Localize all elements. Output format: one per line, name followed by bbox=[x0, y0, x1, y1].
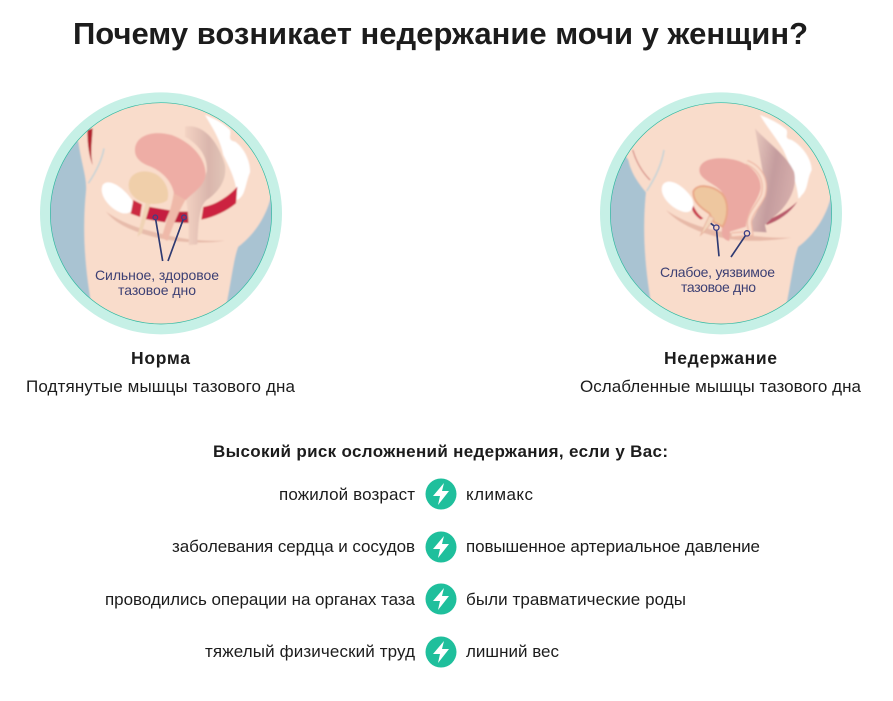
uterus bbox=[699, 158, 761, 241]
uterus bbox=[135, 133, 206, 200]
weak muscles bbox=[692, 206, 703, 220]
icon: bolt bbox=[426, 532, 456, 562]
rectum bbox=[750, 128, 795, 232]
pointer lines bbox=[153, 215, 186, 261]
anatomy circle bbox=[50, 103, 272, 324]
risk row 3 bbox=[105, 584, 686, 614]
rectum bbox=[185, 126, 225, 245]
label: weak pelvic floor: Слабое, уязвимое bbox=[660, 264, 775, 280]
caption: norm: Норма bbox=[131, 348, 190, 368]
illustration: weakened pelvic floor bbox=[600, 92, 843, 334]
top-left vein bbox=[633, 150, 650, 180]
label: weak pelvic floor: тазовое дно bbox=[681, 279, 756, 295]
risk row 3: были травматические роды bbox=[466, 590, 686, 609]
label: weak pelvic floor bbox=[660, 264, 775, 295]
risk row 2 bbox=[172, 532, 760, 562]
thin teal ring bbox=[50, 103, 272, 324]
urethra bbox=[701, 216, 714, 235]
outer mint ring bbox=[40, 92, 282, 334]
label: healthy pelvic floor bbox=[95, 267, 219, 298]
risk heading: Высокий риск осложнений недержания, если у Вас: bbox=[213, 442, 668, 461]
label: healthy pelvic floor: Сильное, здоровое bbox=[95, 267, 219, 283]
bone highlights bbox=[760, 115, 812, 198]
caption: incontinence: Ослабленные мышцы тазового дна bbox=[580, 377, 862, 396]
risk row 3: проводились операции на органах таза bbox=[105, 590, 416, 609]
title: Почему возникает недержание мочи у женщин? bbox=[73, 16, 808, 51]
anatomy circle bbox=[610, 103, 832, 324]
bone highlights bbox=[205, 115, 250, 200]
vagina tract outline bbox=[732, 162, 764, 235]
bladder bbox=[129, 171, 168, 204]
label: healthy pelvic floor: тазовое дно bbox=[118, 282, 196, 298]
caption: norm: Подтянутые мышцы тазового дна bbox=[26, 377, 296, 396]
risk row 4: лишний вес bbox=[466, 642, 560, 661]
icon: bolt bbox=[426, 478, 456, 510]
bladder bbox=[693, 186, 727, 227]
risk row 1 bbox=[279, 478, 534, 510]
risk row 1: климакс bbox=[466, 485, 534, 504]
icon: bolt bbox=[426, 636, 456, 668]
risk row 4: тяжелый физический труд bbox=[205, 642, 415, 661]
pelvic floor muscles bbox=[131, 200, 142, 217]
risk row 4 bbox=[205, 636, 560, 668]
pointer lines bbox=[711, 223, 750, 257]
risk row 2: повышенное артериальное давление bbox=[466, 537, 760, 556]
thin teal ring bbox=[610, 103, 832, 324]
outer mint ring bbox=[600, 92, 842, 334]
lower muscle band bbox=[106, 212, 225, 243]
lower muscle band bbox=[666, 210, 792, 241]
urethra bladder tract bbox=[137, 202, 151, 237]
caption: incontinence: Недержание bbox=[664, 348, 777, 368]
risk row 2: заболевания сердца и сосудов bbox=[172, 537, 415, 556]
caption: incontinence bbox=[580, 348, 862, 396]
risk row 1: пожилой возраст bbox=[279, 485, 415, 504]
icon: bolt bbox=[426, 584, 456, 614]
caption: norm bbox=[26, 348, 296, 396]
illustration: healthy pelvic floor bbox=[40, 92, 283, 334]
vein at top-left bbox=[87, 128, 93, 165]
